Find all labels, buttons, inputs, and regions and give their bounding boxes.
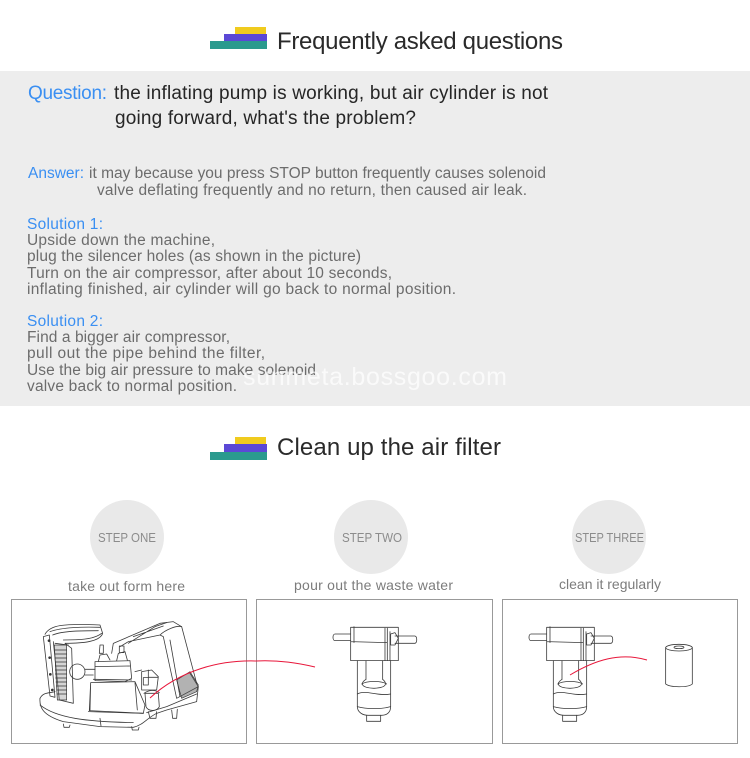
panel: step three filter and element illustration xyxy=(502,600,738,744)
question text block: Question: xyxy=(28,83,107,104)
arrow: red pointer line, start xyxy=(150,661,256,698)
solution 2 text block: pull out the pipe behind the filter, xyxy=(27,345,265,362)
step two caption: pour out the waste water xyxy=(294,577,453,593)
step two badge xyxy=(334,500,408,574)
step one badge xyxy=(90,500,164,574)
step three caption: clean it regularly xyxy=(559,576,661,592)
solution 2 text block xyxy=(27,313,316,395)
panel: step one machine illustration xyxy=(12,600,256,744)
solution 1 text block: Upside down the machine, xyxy=(27,232,215,249)
solution 2 text block: Use the big air pressure to make solenoid xyxy=(27,362,316,379)
solution 1 text block: Turn on the air compressor, after about 10 seconds, xyxy=(27,265,392,282)
step one badge: STEP ONE xyxy=(98,530,156,545)
icon: filter element cylinder xyxy=(666,644,692,687)
panel: FAQ gray background xyxy=(0,71,750,406)
solution 2 text block: Solution 2: xyxy=(27,313,103,330)
arrow: red pointer line xyxy=(570,657,647,675)
question text block: going forward, what's the problem? xyxy=(115,108,416,129)
heading: Frequently asked questions: Frequently asked questions xyxy=(277,28,563,55)
icon: air filter xyxy=(333,627,417,721)
step three badge xyxy=(572,500,646,574)
arrow: red pointer line, end xyxy=(256,661,315,667)
solution 1 text block: plug the silencer holes (as shown in the picture) xyxy=(27,248,361,265)
watermark: sunmeta.bossgoo.com xyxy=(243,363,507,391)
step one caption: take out form here xyxy=(68,578,185,594)
answer text block xyxy=(28,165,546,199)
heading: Clean up the air filter: Clean up the air filter xyxy=(277,434,501,461)
answer text block: Answer: xyxy=(28,165,84,182)
answer text block: it may because you press STOP button frequently causes solenoid xyxy=(89,165,546,182)
icon: air filter xyxy=(529,627,613,721)
question text block xyxy=(28,83,549,129)
solution 1 text block xyxy=(27,216,456,298)
icon: stacked bars, FAQ heading xyxy=(210,27,267,49)
step three badge: STEP THREE xyxy=(575,530,644,545)
icon: heat press machine xyxy=(40,622,198,730)
solution 2 text block: Find a bigger air compressor, xyxy=(27,329,230,346)
solution 2 text block: valve back to normal position. xyxy=(27,378,237,395)
question text block: the inflating pump is working, but air cylinder is not xyxy=(114,83,549,104)
solution 1 text block: inflating finished, air cylinder will go back to normal position. xyxy=(27,281,456,298)
icon: stacked bars, air filter heading xyxy=(210,437,267,460)
panel: step two filter illustration xyxy=(256,600,492,744)
step two badge: STEP TWO xyxy=(342,530,402,545)
solution 1 text block: Solution 1: xyxy=(27,216,103,233)
answer text block: valve deflating frequently and no return, then caused air leak. xyxy=(97,182,527,199)
